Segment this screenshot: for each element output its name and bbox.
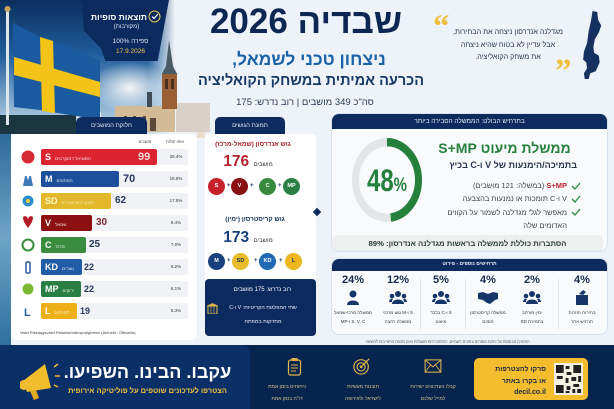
- bar chart rows: 17.5%: [170, 198, 182, 203]
- bullet 3: האדומים שלה: [523, 221, 567, 230]
- bloc 1 parties: +: [278, 183, 282, 189]
- bar: C: C מרכז: [45, 240, 65, 250]
- panel header: בתרחיש הבולט: הממשלה הסבירה ביותר: [414, 118, 525, 125]
- callout: majority needed: [205, 279, 316, 336]
- bar chart rows: 22: [84, 262, 94, 272]
- bloc 2 parties: KD: [264, 258, 271, 264]
- CTA text: decil.co.il: [514, 389, 546, 396]
- scenario: 4% ballot: בחירות חוזרות: [568, 310, 596, 315]
- scenario heading: ממשלת מיעוט S+MP: [438, 140, 571, 156]
- quote text: מגדלנה אנדרסון ניצחה את הבחירות,: [453, 27, 563, 36]
- item text: [410, 384, 456, 402]
- footer item: mail: [410, 359, 456, 402]
- item text: ניתוחים בזמן אמת: [268, 384, 306, 390]
- bar: M: M המתונים: [45, 174, 73, 184]
- bar chart rows: 28.4%: [170, 154, 182, 159]
- callout text: שתי המפלגות הקריטיות: V ו-C: [229, 305, 297, 311]
- bar: V: [41, 215, 92, 231]
- CTA text: [495, 366, 546, 396]
- bloc 1 parties: [208, 178, 300, 195]
- callout text: [229, 305, 297, 325]
- subtitle: technical win: ניצחון טכני לשמאל,: [232, 49, 386, 69]
- bar chart rows: 19: [80, 306, 90, 316]
- column heading: seats: מושבים: [139, 139, 151, 144]
- badge: final results: [82, 0, 169, 61]
- scenario: 24%: [334, 274, 372, 324]
- title: שבדיה 2026: [210, 2, 402, 41]
- footer item: target: [345, 358, 381, 402]
- bar: MP: [41, 281, 81, 297]
- bloc 2 parties: M: [214, 258, 219, 264]
- footer item: reports: [268, 358, 306, 402]
- bloc 1 parties: MP: [287, 183, 296, 189]
- tab: blocs picture: תמונת הגושים: [232, 123, 268, 129]
- panel header: [331, 258, 608, 271]
- bloc 1 parties: +: [227, 183, 231, 189]
- bar chart rows: 22: [84, 284, 94, 294]
- item text: [345, 384, 381, 402]
- bar chart rows: 6.2%: [171, 264, 181, 269]
- bullet 1: S+MP (במשלה: 121 מושבים): [473, 181, 567, 190]
- party logos: L: [24, 307, 31, 319]
- bar: SD: SD דמוקרטים שבדים: [45, 196, 94, 206]
- bloc 1 parties: V: [238, 183, 241, 189]
- subtitle: coalition decision: הכרעה אמיתית במשחק הקואליציה: [198, 73, 424, 89]
- probability pill: [332, 235, 603, 253]
- bloc 2 parties: +: [279, 258, 283, 264]
- column heading: percent: אחוז קולות: [166, 139, 184, 144]
- bloc 2 parties: L: [292, 258, 295, 264]
- bar chart rows: 7.0%: [171, 242, 181, 247]
- CTA text: או בקרו באתר: [502, 378, 546, 384]
- bar: V: V שמאל: [45, 218, 67, 228]
- bar: L: [41, 303, 77, 319]
- icon: target: [353, 358, 370, 375]
- badge date: 17.9.2026: [116, 48, 145, 55]
- panel: seat results bar chart: [11, 134, 197, 340]
- divider marker diamond: [313, 208, 321, 216]
- bloc 2 parties: [208, 253, 302, 270]
- tab: blocs picture: [215, 117, 285, 135]
- badge title: תוצאות סופיות: [91, 12, 147, 22]
- scenario: 5%: 5%: [433, 274, 449, 286]
- bar: L: L ליברלים: [45, 306, 70, 316]
- seats summary: סה"כ 349 מושבים | רוב נדרש: 175: [236, 97, 374, 108]
- party logos: [22, 150, 34, 319]
- bar chart rows: 25: [89, 239, 100, 250]
- scenario: 4% handshake: הסכם: [482, 319, 494, 324]
- quote text: את משחק הקואליציה.: [475, 52, 541, 61]
- item text: לישראל ולאירופה: [345, 396, 381, 402]
- badge subtitle: (מקורבות): [114, 24, 139, 30]
- bloc 2 parties: +: [254, 258, 258, 264]
- icon: QR code: [554, 363, 583, 395]
- bar: KD: KD נוצרים: [45, 262, 74, 272]
- bar chart rows: 62: [115, 195, 126, 206]
- bloc 2 number: מושבים 173: [223, 229, 273, 246]
- item text: תובנות מעשיות: [347, 384, 379, 390]
- badge count: ספירה 100%: [113, 38, 148, 45]
- footer band: [0, 345, 614, 409]
- bar: M: [41, 171, 119, 187]
- scenario: 12%: S ו-M גוש מרכזי: [383, 310, 413, 315]
- scenario: 4% handshake: ממשלה קריסטרסון: [470, 310, 506, 315]
- scenario: 2%: בתמיכת SD: [521, 319, 543, 324]
- scenario: 2%: [520, 274, 544, 324]
- item text: למייל שלכם: [421, 396, 445, 402]
- scenario: 4% handshake: [470, 274, 506, 324]
- scenario: 24%: S, V, C ו-MP: [341, 319, 365, 324]
- bullet 2: V ו-C תומכות או נמנעות בהצבעה: [463, 194, 567, 203]
- bar chart rows: 99: [138, 151, 150, 163]
- quote text: אבל עדיין לא בטוח שהיא ניצחה: [461, 40, 555, 48]
- bar chart rows: 5.3%: [171, 308, 181, 313]
- panel: scenario: [331, 113, 608, 252]
- scenario: 4% ballot: תרחיש אחר: [571, 319, 593, 324]
- scenario: 4% ballot: 4%: [574, 274, 590, 286]
- scenario: 4% handshake: 4%: [480, 274, 496, 286]
- callout heading: רוב נדרש: 175 מושבים: [234, 287, 291, 293]
- icon: envelope: [424, 359, 442, 373]
- bar: S: S הסוציאל דמוקרטים: [45, 152, 91, 162]
- bullet 3: [448, 208, 567, 230]
- footnote: התחזית מבוססת על ניתוח מומחים ונתונים רשמיים; ההסתברויות מעוגלות ואינן מהוות התחייבות לתוצאה: [365, 340, 530, 344]
- panel header: [331, 113, 608, 129]
- item text: קבלו העדכונים ישירות: [410, 384, 456, 390]
- CTA text: סרקו להצטרפות: [495, 366, 546, 373]
- bar: MP: MP ירוקים: [45, 284, 74, 294]
- probability pill: הסתברות כוללת לממשלה בראשות מגדלנה אנדרסון: 89%: [369, 239, 566, 248]
- bar chart rows: 6.1%: [171, 286, 181, 291]
- scenario: 2%: ימין מורחב: [522, 310, 542, 315]
- item text: דו"ח בזמן אמת: [271, 396, 303, 402]
- quote text: [453, 27, 563, 61]
- panel: blocs: [205, 134, 316, 282]
- bullet 3: מאפשר לגל' מגדלנה לשמור על הקווים: [448, 208, 567, 217]
- chart footnote: Valet Riksdagsvalet Resultat/Valmyndigheten (Aktuellt / Officiella): [20, 330, 136, 335]
- quote mark close: ”: [555, 53, 572, 89]
- footer headline: עקבו. הבינו. השפיעו.: [64, 362, 231, 382]
- quote: [433, 9, 602, 89]
- scenario: 5%: [430, 274, 452, 324]
- scenario: 5%: מיעוט: [436, 319, 446, 324]
- scenario: 2%: 2%: [524, 274, 540, 286]
- donut chart: 48%: [352, 138, 422, 222]
- scenario: 24%: ממשלה מרכז-שמאל: [334, 310, 372, 315]
- scenario: 5%: S ו-C בלבד: [430, 310, 452, 315]
- scenario: 12%: ממשלה רחבה: [385, 319, 411, 324]
- bloc 1 parties: +: [250, 183, 254, 189]
- bar chart rows: 18.8%: [170, 176, 182, 181]
- icon: megaphone: [20, 363, 60, 400]
- icon: checks: [572, 182, 580, 216]
- panel: other scenarios: [331, 258, 608, 335]
- bar: KD: [41, 259, 82, 275]
- scenario: 4% ballot: [568, 274, 596, 324]
- icon: parliament building: [207, 303, 218, 314]
- bloc 1 parties: S: [215, 183, 218, 189]
- scenario subheading: בתמיכה/הימנעות של V ו-C בכיץ: [450, 160, 577, 170]
- panel header: תרחישים נוספים - פירוט: [442, 261, 497, 267]
- bar chart rows: 30: [96, 217, 107, 228]
- tab: seats and percentages: [76, 117, 147, 135]
- scenario: 12%: [383, 274, 413, 324]
- callout text: מחזיקות במפתח: [244, 319, 282, 325]
- icon: clipboard: [288, 358, 302, 376]
- icon: Swedish flag on a pole: [4, 6, 100, 125]
- panel: QR call to action: [474, 358, 588, 400]
- tab: seats and percentages: חלוקת המושבים: [91, 123, 132, 129]
- bar chart rows: 8.4%: [171, 220, 181, 225]
- bloc 1 title: גוש אנדרסון (שמאל-מרכז): [215, 141, 291, 148]
- bar: C: [41, 237, 86, 253]
- bloc 2 parties: SD: [237, 258, 244, 264]
- footer subheadline: הצטרפו לעדכונים שוטפים על פוליטיקה אירופית: [68, 386, 227, 395]
- bloc 1 number: מושבים 176: [223, 153, 273, 170]
- scenario: 12%: 12%: [387, 274, 409, 286]
- bloc 1 parties: C: [266, 183, 269, 189]
- bloc 2 title: גוש קריסטרסון (ימין): [225, 216, 285, 223]
- quote mark open: “: [433, 9, 450, 45]
- bloc 2 parties: +: [227, 258, 231, 264]
- bar: SD: [41, 193, 111, 209]
- footer left dark tab: [0, 345, 250, 409]
- bar chart rows: 70: [123, 173, 135, 185]
- item text: [268, 384, 306, 402]
- icon: check: [148, 10, 160, 22]
- donut chart: 48%: 48%: [367, 163, 407, 198]
- bar chart rows: [41, 149, 188, 319]
- bar: S: [41, 149, 157, 165]
- bullet list: [448, 181, 580, 230]
- icon: map of Sweden: [583, 11, 602, 79]
- scenario: 24%: 24%: [342, 274, 364, 286]
